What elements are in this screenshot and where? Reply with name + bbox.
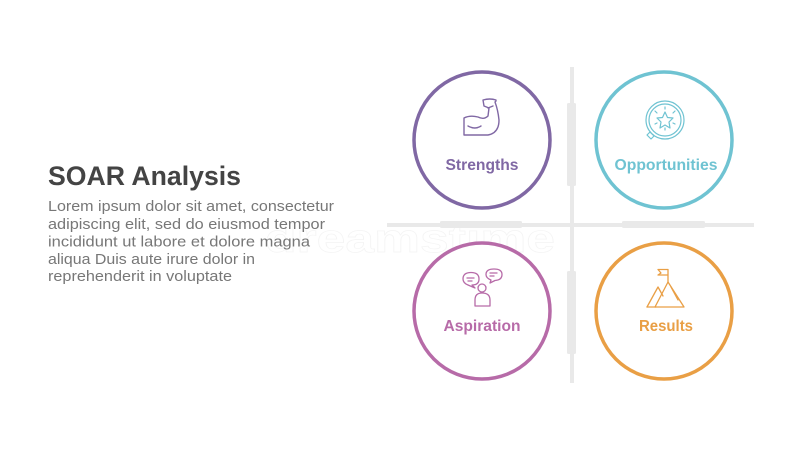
circle: Results	[596, 243, 732, 379]
panel: Strengths	[414, 72, 550, 208]
circle: Opportunities	[596, 72, 732, 208]
icon: person with speech bubbles	[463, 269, 502, 306]
heading: SOAR Analysis: SOAR Analysis	[48, 161, 241, 191]
label: Results: Results	[639, 318, 693, 335]
panel: Results	[596, 243, 732, 379]
text block: description: adipiscing elit, sed do eiusmod tempor	[48, 217, 325, 233]
circle: Aspiration	[414, 243, 550, 379]
panel: Opportunities	[596, 72, 732, 208]
watermark: dreamstime	[265, 217, 555, 261]
text block: description: incididunt ut labore et dolore magna	[48, 234, 311, 250]
label: Aspiration: Aspiration	[444, 318, 520, 335]
text block: description	[48, 199, 334, 285]
icon: magnifier with star	[646, 101, 684, 139]
circle: Strengths	[414, 72, 550, 208]
text block: description: reprehenderit in voluptate	[48, 269, 232, 285]
panel: Aspiration	[414, 243, 550, 379]
text block: description: aliqua Duis aute irure dolor in	[48, 252, 255, 268]
icon: flexed arm	[464, 99, 499, 135]
label: Opportunities: Opportunities	[614, 157, 718, 174]
label: Strengths: Strengths	[446, 157, 518, 174]
text block: description: Lorem ipsum dolor sit amet, consectetur	[48, 199, 334, 215]
icon: mountain with flag	[647, 270, 684, 307]
quadrant cross divider	[387, 67, 754, 383]
